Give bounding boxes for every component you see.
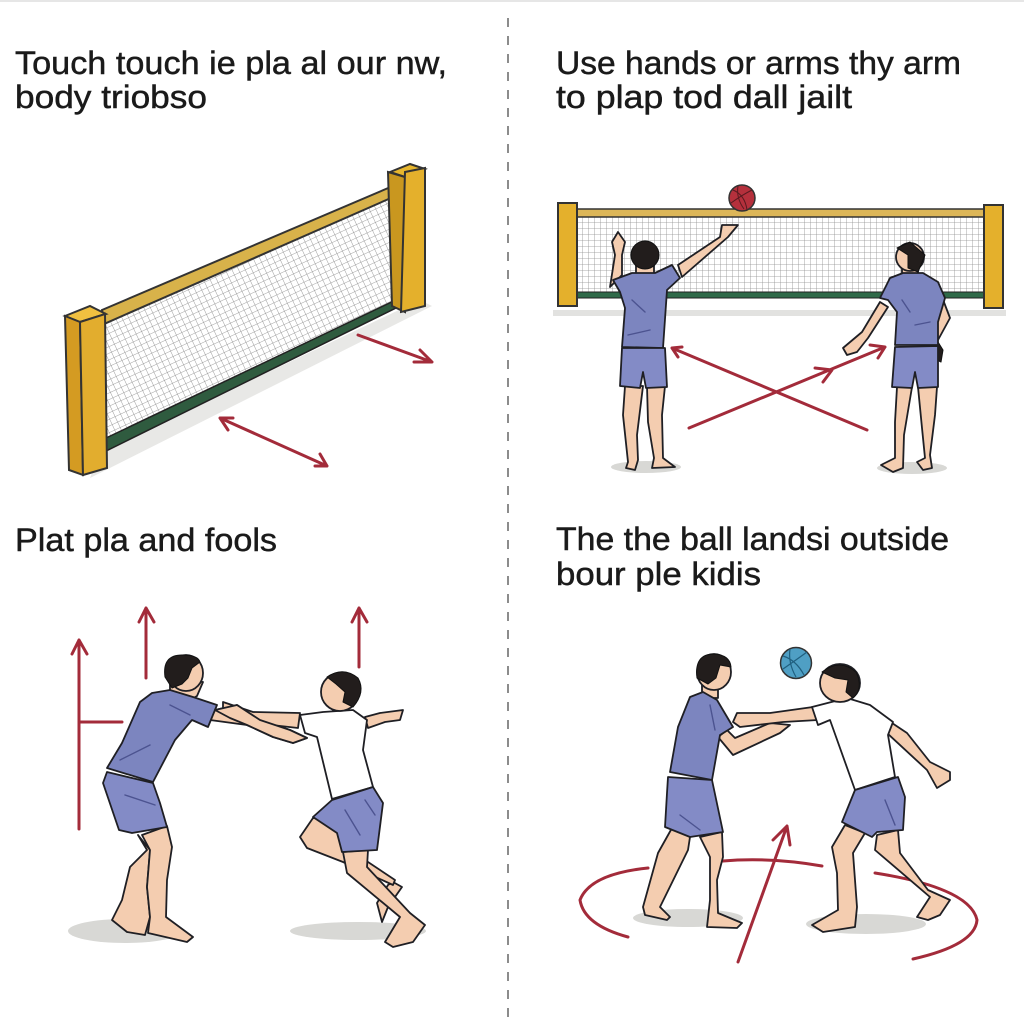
player: right, back view [843, 242, 950, 474]
player: blue shirt [68, 655, 307, 943]
heading: top left: Touch touch ie pla al our nw, [15, 45, 447, 81]
net illustration [65, 164, 432, 478]
icon: red ball [729, 185, 755, 211]
panel: bottom right players [556, 521, 977, 962]
heading: top right: Use hands or arms thy arm [556, 45, 961, 81]
court circles and arrow [580, 826, 977, 962]
arrows: upward [72, 608, 367, 829]
panel: top left net: body triobso [15, 79, 207, 115]
icon: blue ball [780, 648, 812, 678]
player: white shirt [215, 672, 426, 947]
panel: bottom left players [15, 522, 426, 947]
heading: bottom right: The the ball landsi outside [556, 521, 949, 557]
player: white shirt [733, 664, 950, 934]
panel divider [507, 18, 509, 1020]
arrow: double headed below net [220, 418, 327, 466]
arrow: crossing left [672, 347, 867, 430]
panel: top left net [15, 45, 447, 478]
net illustration [553, 203, 1006, 316]
player: left, back view [610, 225, 738, 473]
panel: top right net and players: to plap tod dall jailt [556, 79, 852, 115]
arrow: right of net [358, 335, 432, 362]
heading: bottom left: Plat pla and fools [15, 522, 277, 558]
panel: top right net and players [553, 45, 1006, 474]
arrow: crossing right [689, 345, 885, 428]
player: blue shirt [633, 654, 790, 928]
panel: bottom right players: bour ple kidis [556, 556, 761, 592]
